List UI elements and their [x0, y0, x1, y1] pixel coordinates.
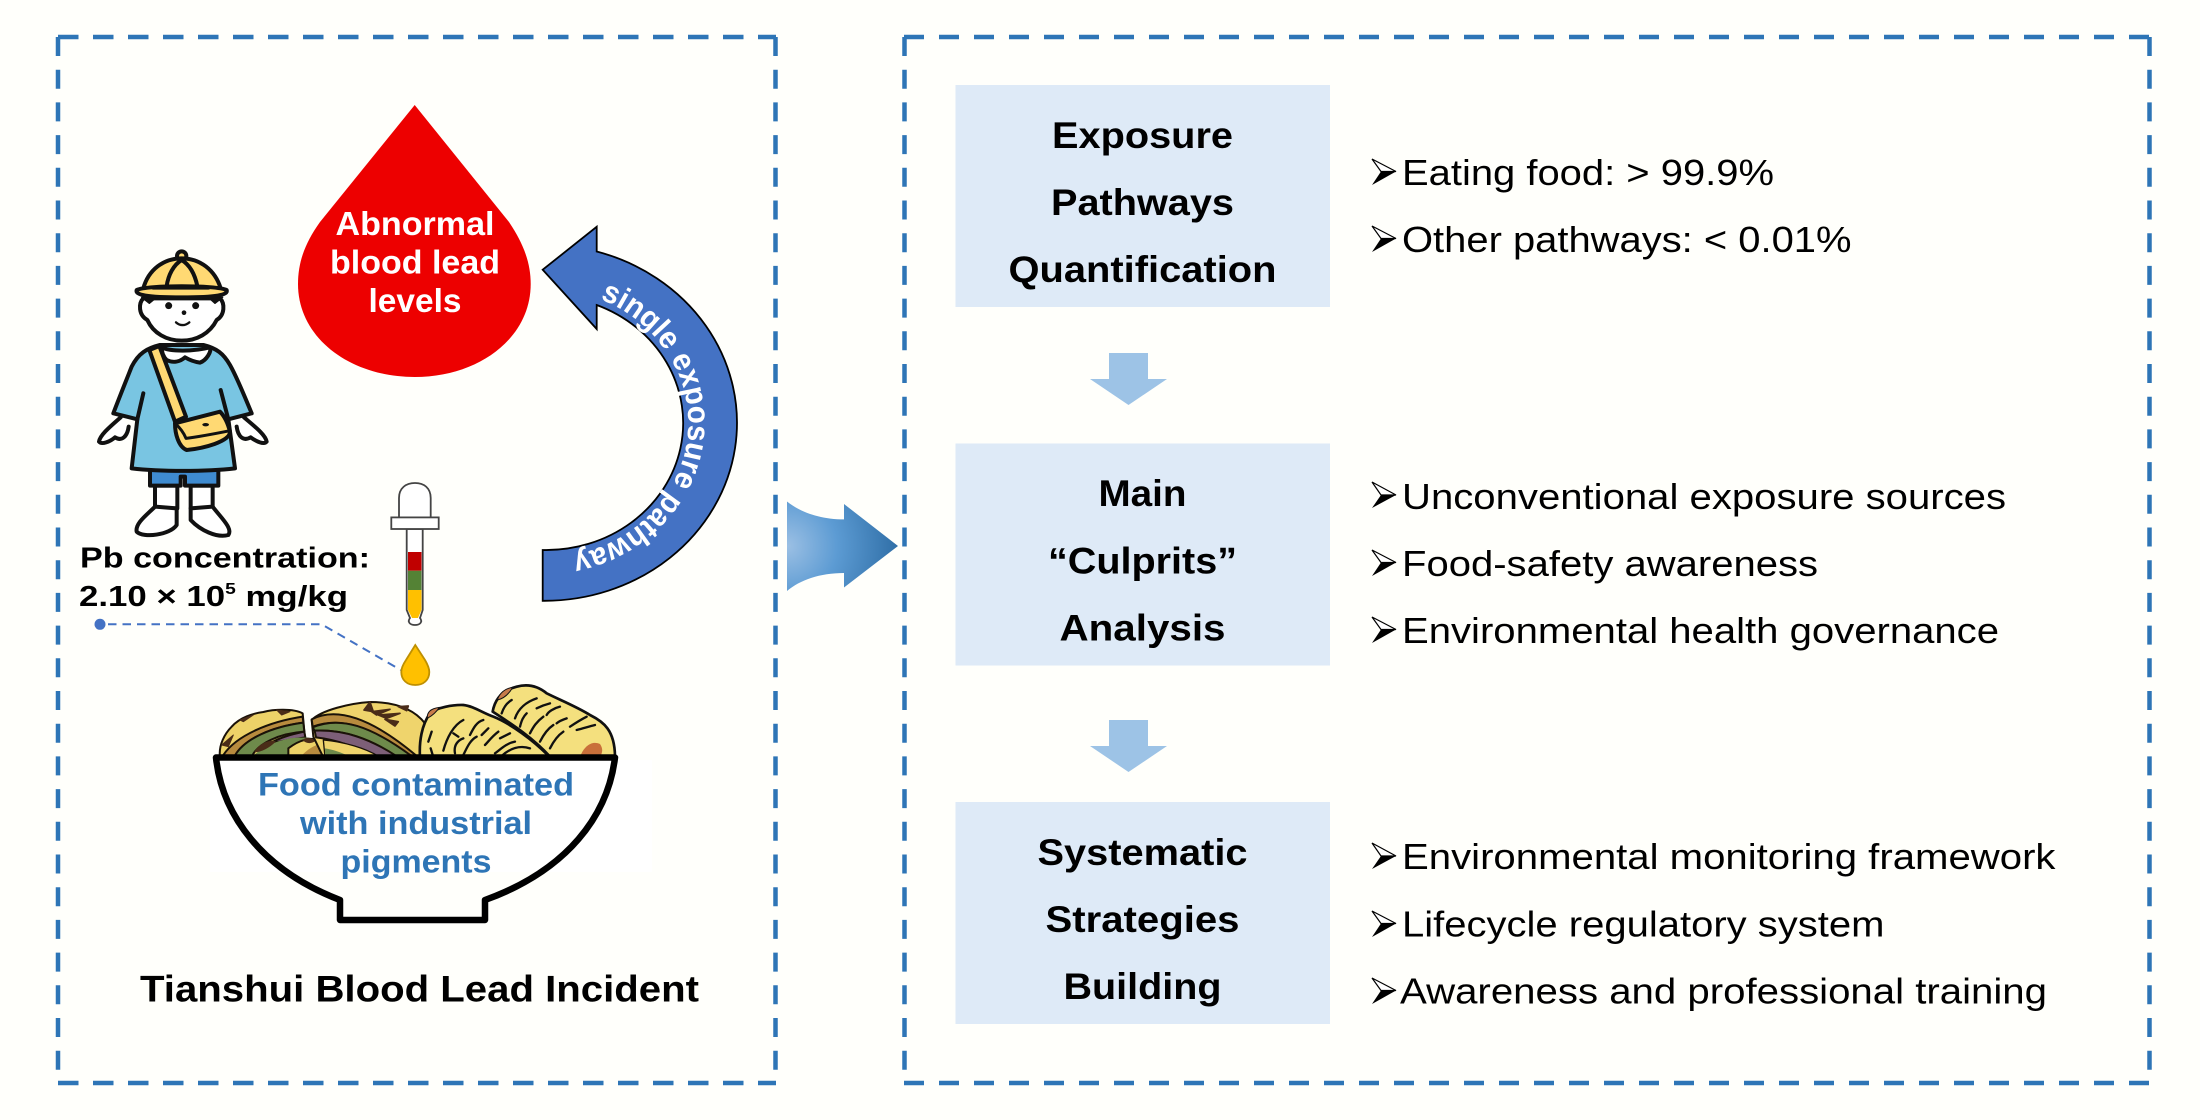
panel: Tianshui incident: [56, 34, 778, 1086]
icon: blood drop: [298, 105, 531, 377]
box: Main Culprits Analysis: [956, 444, 1330, 666]
arrow: down 1: [1090, 353, 1167, 405]
box: Systematic Strategies Building: Building: [1064, 966, 1222, 1007]
icon: pigmented food: [220, 685, 615, 757]
box: Main Culprits Analysis: Main: [1098, 473, 1186, 514]
list: exposure pathways: [1372, 152, 1852, 260]
blood drop label: levels: [368, 282, 462, 319]
list: culprits: [1372, 476, 2006, 651]
arrow: down 2: [1090, 720, 1167, 772]
arrow: single exposure pathway: [541, 224, 738, 602]
text: Pb concentration: 5: [225, 581, 236, 598]
box: Systematic Strategies Building: Systematic: [1038, 832, 1248, 873]
white backing behind bowl text: [210, 760, 652, 872]
text: Pb concentration: [79, 542, 370, 613]
heading: Tianshui Blood Lead Incident: Tianshui Blood Lead Incident: [140, 969, 699, 1010]
right cake slice: [312, 702, 425, 757]
left cake slice: [220, 710, 323, 757]
box: Exposure Pathways Quantification: Pathways: [1051, 182, 1234, 223]
icon: child with hat and bag: [99, 251, 267, 536]
box: Systematic Strategies Building: Strategies: [1046, 899, 1240, 940]
arrow: single exposure pathway: single exposure pathway: [576, 286, 705, 572]
list: culprits: Environmental health governance: [1402, 610, 1999, 651]
box: Exposure Pathways Quantification: [956, 85, 1330, 307]
icon: pigment drop: [401, 645, 429, 685]
list: culprits: Unconventional exposure sources: [1402, 476, 2006, 517]
text: Pb concentration: mg/kg: [236, 581, 348, 613]
blood drop label: Abnormal: [336, 205, 494, 242]
corn cob front: [420, 705, 550, 757]
list: strategies: Environmental monitoring framework: [1402, 836, 2057, 877]
box: Main Culprits Analysis: Analysis: [1060, 608, 1226, 648]
list: strategies: Awareness and professional training: [1400, 970, 2047, 1012]
text: bowl label: pigments: [340, 843, 492, 879]
list: exposure pathways: Other pathways: < 0.01%: [1402, 219, 1852, 260]
panel: analysis framework: [904, 37, 2150, 1083]
list: culprits: Food-safety awareness: [1402, 543, 1818, 584]
text: Pb concentration: Pb concentration:: [80, 542, 370, 574]
text: bowl label: Food contaminated: [258, 767, 574, 803]
list: exposure pathways: Eating food: > 99.9%: [1402, 152, 1774, 193]
box: Exposure Pathways Quantification: Quantification: [1008, 249, 1276, 290]
list: strategies: [1372, 836, 2057, 1012]
text: bowl label: [258, 767, 574, 879]
blood drop label: blood lead: [330, 244, 500, 280]
icon: bowl: [216, 758, 615, 920]
corn cob back: [493, 685, 615, 757]
icon: dropper: [391, 483, 439, 625]
blood drop label: [330, 205, 500, 319]
arrow: left panel to right panel: [787, 502, 898, 591]
callout line: Pb to pigment drop: [94, 619, 401, 670]
box: Exposure Pathways Quantification: Exposure: [1052, 115, 1233, 156]
text: Pb concentration: 2.10 × 10: [79, 581, 201, 613]
list: strategies: Lifecycle regulatory system: [1402, 904, 1884, 945]
box: Main Culprits Analysis: “Culprits”: [1048, 540, 1237, 582]
text: bowl label: with industrial: [299, 805, 532, 841]
box: Systematic Strategies Building: [956, 802, 1330, 1024]
